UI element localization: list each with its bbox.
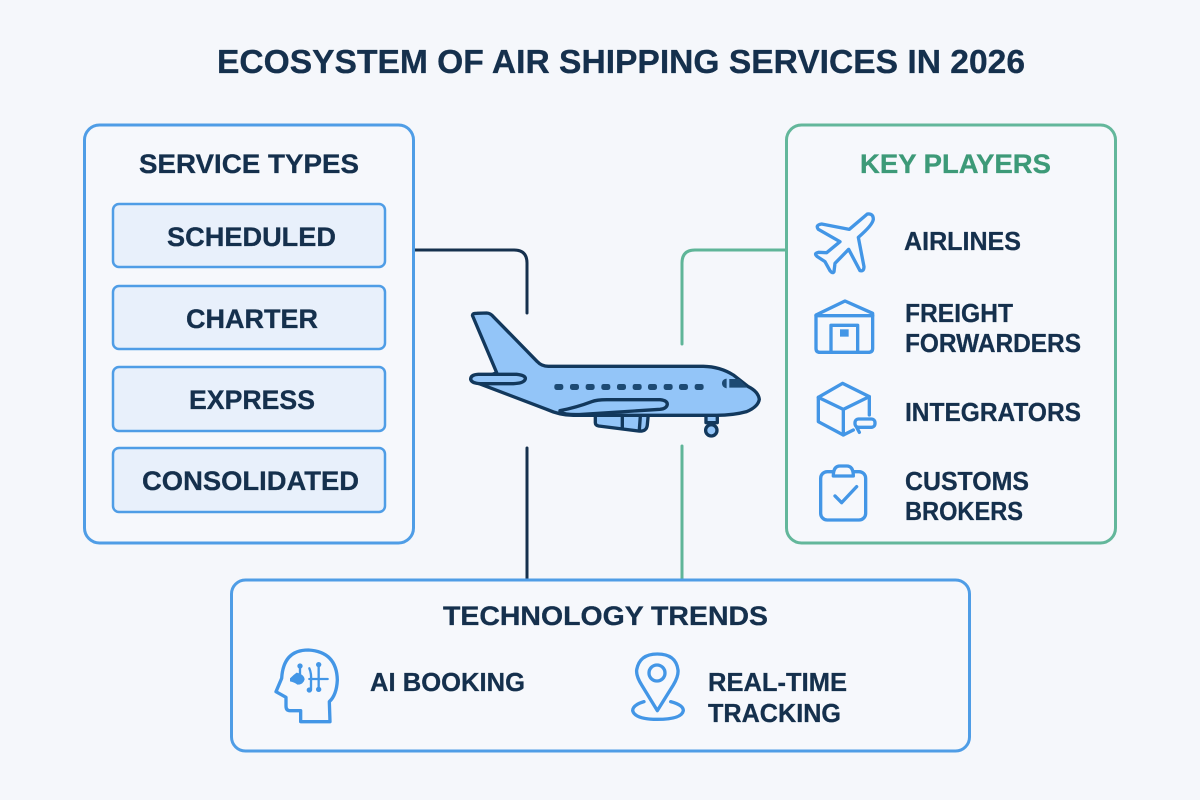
heading: key players: KEY PLAYERS xyxy=(860,149,1051,179)
item: express: EXPRESS xyxy=(189,385,315,415)
panel: technology trends xyxy=(232,580,970,751)
icon: location pin xyxy=(633,654,683,719)
label: integrators: INTEGRATORS xyxy=(905,397,1081,427)
heading: service types: SERVICE TYPES xyxy=(139,149,359,179)
heading: technology trends: TECHNOLOGY TRENDS xyxy=(443,601,768,631)
central airplane illustration xyxy=(471,313,759,436)
connector: service types to plane xyxy=(414,250,527,579)
item: charter xyxy=(113,286,385,349)
wing xyxy=(560,400,667,415)
item: consolidated xyxy=(113,448,385,512)
label: customs brokers: BROKERS xyxy=(905,496,1023,526)
tail stabilizer xyxy=(471,374,525,384)
title: ECOSYSTEM OF AIR SHIPPING SERVICES IN 2026 xyxy=(217,43,1025,80)
fuselage and tail fin xyxy=(472,313,759,415)
label: airlines: AIRLINES xyxy=(904,226,1021,256)
label: customs brokers: CUSTOMS xyxy=(905,466,1029,496)
cabin windows xyxy=(554,384,704,390)
icon: clipboard xyxy=(821,466,866,520)
label: real-time tracking: REAL-TIME xyxy=(708,667,847,697)
landing gear xyxy=(706,415,717,436)
item: charter: CHARTER xyxy=(186,304,318,334)
engine xyxy=(595,411,649,431)
icon: parcel box xyxy=(818,383,875,435)
label: real-time tracking: TRACKING xyxy=(708,698,841,728)
panel: service types xyxy=(84,125,414,543)
item: express xyxy=(113,367,385,431)
label: freight forwarders: FORWARDERS xyxy=(905,328,1081,358)
item: scheduled: SCHEDULED xyxy=(167,222,336,252)
label: AI booking: AI BOOKING xyxy=(370,667,525,697)
label: freight forwarders xyxy=(905,298,1081,358)
label: freight forwarders: FREIGHT xyxy=(905,298,1013,328)
label: real-time tracking xyxy=(708,667,847,728)
panel: key players xyxy=(786,125,1116,543)
label: customs brokers xyxy=(905,466,1029,526)
icon: airplane xyxy=(816,214,873,273)
cockpit window xyxy=(722,379,747,388)
engine bands xyxy=(622,412,641,430)
item: scheduled xyxy=(113,204,385,267)
item: consolidated: CONSOLIDATED xyxy=(142,466,359,496)
icon: warehouse xyxy=(816,301,873,352)
icon: AI head xyxy=(276,650,337,722)
connector: key players to plane xyxy=(682,250,786,579)
